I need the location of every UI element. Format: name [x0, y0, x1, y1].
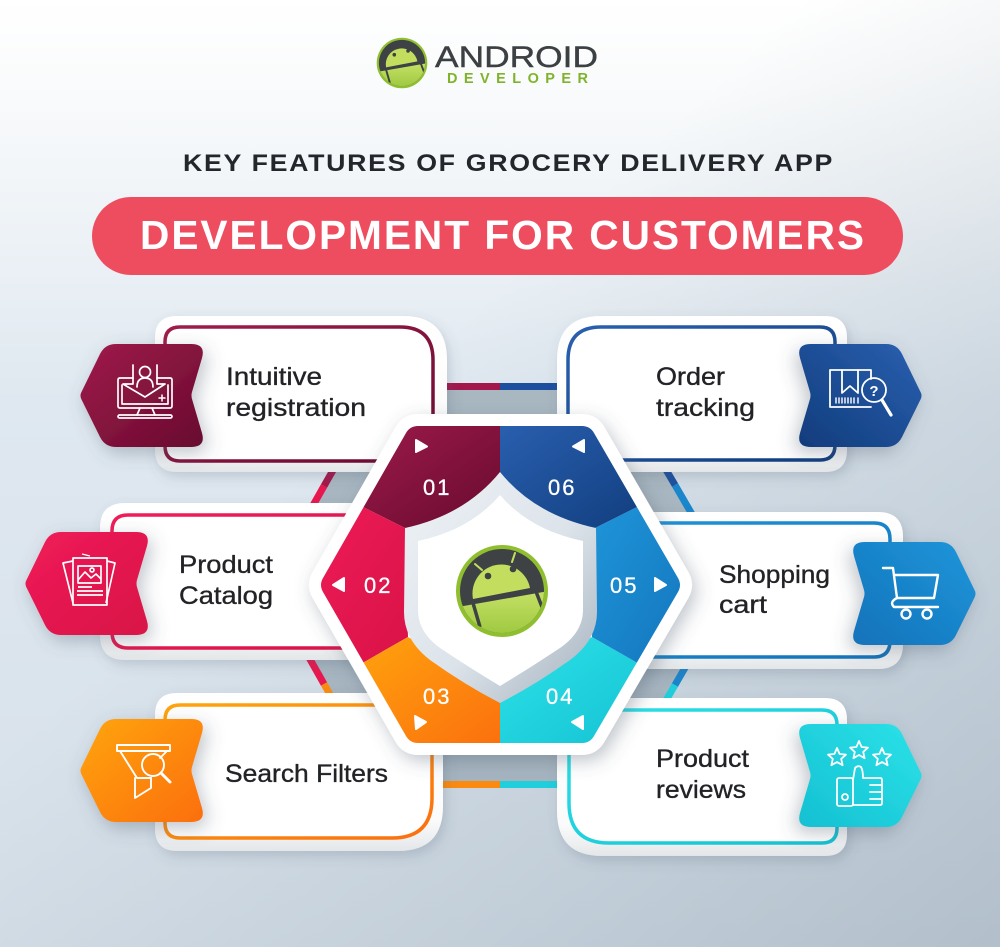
central hexagon — [300, 420, 700, 750]
title pill — [92, 197, 903, 275]
card text: reviews — [656, 776, 746, 804]
hexagon white frame — [321, 426, 680, 743]
card text: Intuitive — [226, 363, 322, 391]
card: Order tracking — [557, 316, 847, 472]
logo icon — [376, 38, 428, 88]
hexagon sectors — [321, 426, 680, 743]
logo subtitle: DEVELOPER — [447, 71, 589, 87]
sector numbers — [364, 475, 638, 709]
card: Shopping cart — [580, 512, 903, 669]
badge: shopping cart — [853, 542, 976, 645]
card text: Order — [656, 363, 725, 391]
card text: Catalog — [179, 582, 273, 610]
card text: tracking — [656, 394, 755, 422]
sector numbers: 01 — [423, 475, 451, 500]
card text: cart — [719, 591, 767, 619]
sector numbers: 04 — [546, 684, 574, 709]
icon: monitor with user — [118, 365, 172, 418]
badge: order tracking — [799, 344, 922, 447]
card: Intuitive registration — [155, 316, 447, 472]
icon: funnel with magnifier — [117, 745, 170, 798]
background hexagon frame — [268, 386, 733, 784]
sector numbers: 05 — [610, 573, 638, 598]
logo wordmark: ANDROID — [435, 41, 598, 74]
shield outer — [404, 472, 597, 703]
android emblem — [456, 545, 548, 637]
sector arrows — [333, 440, 666, 729]
card text: Product — [179, 551, 273, 579]
sector numbers: 06 — [548, 475, 576, 500]
icon: catalog pages — [63, 554, 115, 605]
pill heading: DEVELOPMENT FOR CUSTOMERS — [140, 212, 866, 258]
badge: product reviews — [799, 724, 922, 827]
sector numbers: 03 — [423, 684, 451, 709]
badge: search filters — [80, 719, 203, 822]
icon: stars and thumbs up — [828, 741, 891, 806]
card text: registration — [226, 394, 366, 422]
card: Product Catalog — [100, 503, 420, 660]
badge: catalog — [26, 532, 148, 635]
card text: Search Filters — [225, 760, 388, 788]
icon: cart — [883, 568, 938, 618]
card: Product reviews — [557, 698, 847, 856]
logo: Android Developer — [376, 38, 597, 88]
card: Search Filters — [155, 693, 443, 851]
badge: registration — [80, 344, 203, 447]
card text: Shopping — [719, 561, 830, 589]
sector numbers: 02 — [364, 573, 392, 598]
shield inner — [418, 495, 583, 686]
question mark: ? — [869, 383, 879, 400]
title line: KEY FEATURES OF GROCERY DELIVERY APP — [183, 150, 834, 177]
card text: Product — [656, 745, 749, 773]
